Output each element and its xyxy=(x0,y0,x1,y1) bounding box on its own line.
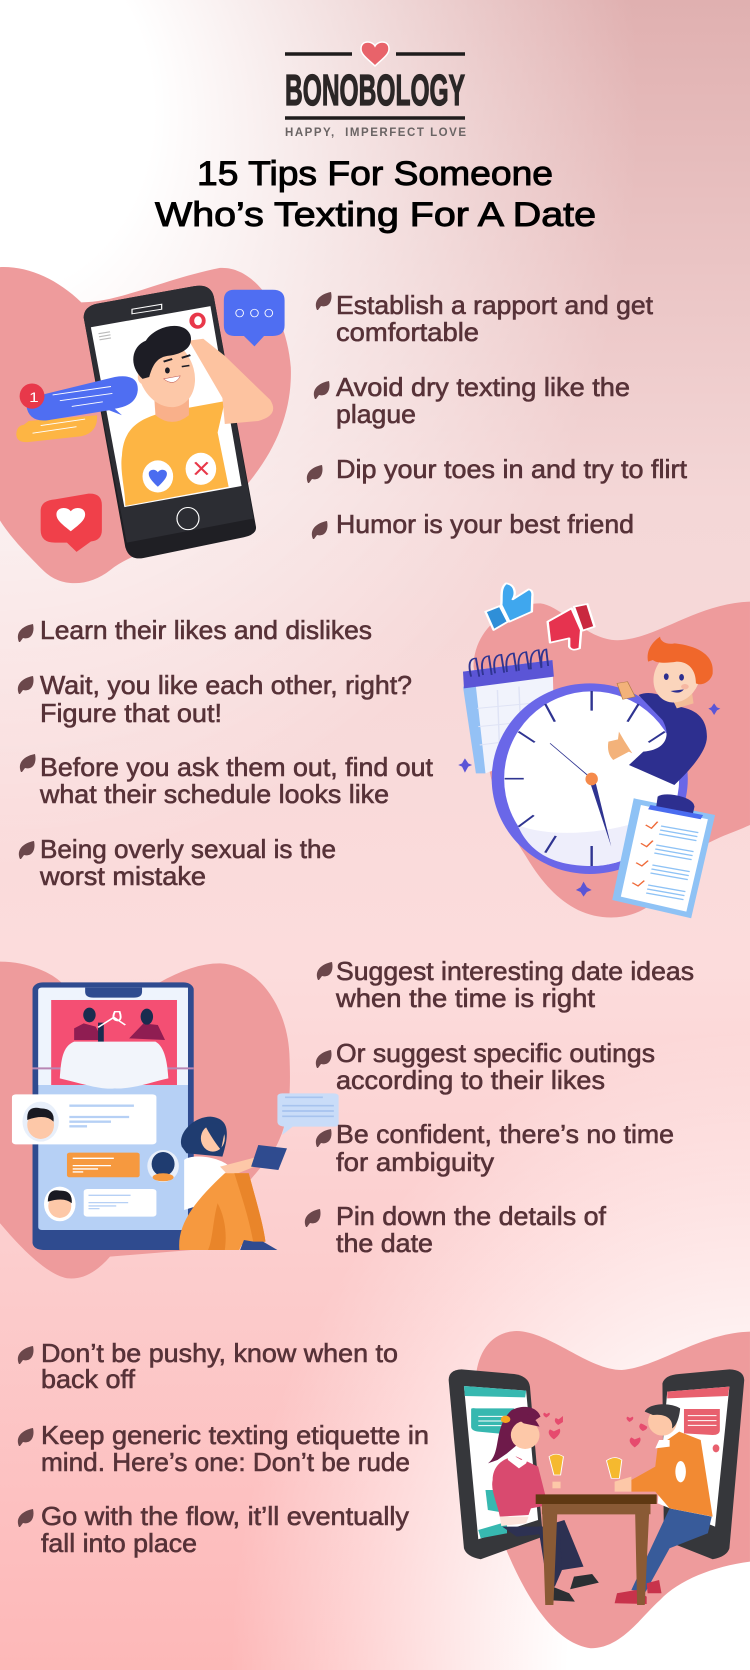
tip: pin down details xyxy=(305,1201,607,1258)
tip: go with the flow: fall into place xyxy=(41,1528,197,1558)
speech bubble: light blue xyxy=(277,1093,339,1135)
tip: pin down details: Pin down the details of xyxy=(336,1201,607,1231)
table xyxy=(536,1494,657,1605)
tip: humor: Humor is your best friend xyxy=(336,509,634,539)
tip: specific outings: Or suggest specific outings xyxy=(336,1038,655,1068)
chat card: orange xyxy=(67,1150,179,1182)
hearts xyxy=(543,1413,647,1447)
tip: pushy: Don’t be pushy, know when to xyxy=(41,1338,398,1368)
speech bubble: blue dots xyxy=(224,290,285,346)
tip: dry texting: plague xyxy=(336,399,416,429)
tip: overly sexual: Being overly sexual is the xyxy=(40,834,336,864)
right phone xyxy=(658,1369,744,1559)
tip: specific outings xyxy=(316,1038,655,1095)
tip: etiquette: mind. Here’s one: Don’t be rude xyxy=(41,1447,410,1477)
tip: schedule xyxy=(20,752,434,809)
tip: confident xyxy=(316,1119,674,1177)
illustration: clock, calendar, man and checklist xyxy=(458,583,750,918)
icon: thumbs down xyxy=(548,604,595,650)
tip: etiquette xyxy=(18,1420,429,1477)
icon: heart notification xyxy=(41,494,102,552)
title: Who’s Texting For A Date xyxy=(155,196,596,234)
tip: rapport: Establish a rapport and get xyxy=(336,290,654,320)
tip: specific outings: according to their likes xyxy=(336,1065,605,1095)
man with thumbs up xyxy=(608,637,713,785)
tip: like each other: Figure that out! xyxy=(40,698,222,728)
tip: pushy xyxy=(18,1338,398,1394)
tip: flirt: Dip your toes in and try to flirt xyxy=(336,454,688,484)
icon: heart xyxy=(361,42,389,66)
tip: schedule: Before you ask them out, find out xyxy=(40,752,434,782)
illustration: phone chat with date and seated woman xyxy=(0,962,339,1279)
tip: dry texting: Avoid dry texting like the xyxy=(336,372,630,402)
chat card: man reply xyxy=(44,1187,156,1221)
logo: BONOBOLOGY xyxy=(285,66,465,115)
speech bubbles: left messages: 1 xyxy=(29,390,39,405)
tip: date ideas: when the time is right xyxy=(335,983,596,1013)
tip: rapport: comfortable xyxy=(336,317,479,347)
tip: like each other: Wait, you like each other, right? xyxy=(40,670,412,700)
tip: etiquette: Keep generic texting etiquette in xyxy=(41,1420,429,1450)
tip: date ideas xyxy=(317,956,694,1013)
tip: like each other xyxy=(18,670,412,728)
calendar xyxy=(463,649,555,773)
tip: dry texting xyxy=(314,372,630,429)
woman xyxy=(488,1407,599,1602)
tip: pin down details: the date xyxy=(336,1228,433,1258)
tip: date ideas: Suggest interesting date ideas xyxy=(336,956,694,986)
icon: thumbs up xyxy=(485,583,533,630)
man xyxy=(606,1404,713,1604)
tip: go with the flow: Go with the flow, it’ll eventually xyxy=(41,1501,409,1531)
tip: schedule: what their schedule looks like xyxy=(39,779,389,809)
tips group 3 xyxy=(305,956,694,1258)
tip: overly sexual xyxy=(19,834,336,891)
tips group 1 xyxy=(307,290,688,539)
clock xyxy=(492,683,688,874)
tips group 2 xyxy=(18,615,434,891)
tip: rapport xyxy=(316,290,654,347)
tip: likes and dislikes: Learn their likes and dislikes xyxy=(40,615,372,645)
phone xyxy=(33,982,194,1250)
tip: confident: Be confident, there’s no time xyxy=(336,1119,674,1149)
left phone xyxy=(449,1369,543,1559)
illustration: phone with man and chat bubbles xyxy=(0,267,291,583)
illustration: couple on a date between two phones xyxy=(449,1331,750,1648)
title xyxy=(155,155,596,234)
chat card: man xyxy=(12,1094,156,1144)
tips group 4 xyxy=(18,1338,429,1558)
tip: overly sexual: worst mistake xyxy=(39,861,206,891)
tip: confident: for ambiguity xyxy=(336,1147,494,1177)
seated woman with tablet xyxy=(179,1117,287,1250)
tip: pushy: back off xyxy=(41,1364,136,1394)
logo: HAPPY, IMPERFECT LOVE xyxy=(285,127,466,139)
logo xyxy=(285,42,466,139)
clipboard checklist xyxy=(612,794,715,918)
sparkles xyxy=(458,703,720,897)
speech bubbles: left messages xyxy=(16,376,138,442)
tip: go with the flow xyxy=(18,1501,409,1558)
title: 15 Tips For Someone xyxy=(197,155,553,193)
